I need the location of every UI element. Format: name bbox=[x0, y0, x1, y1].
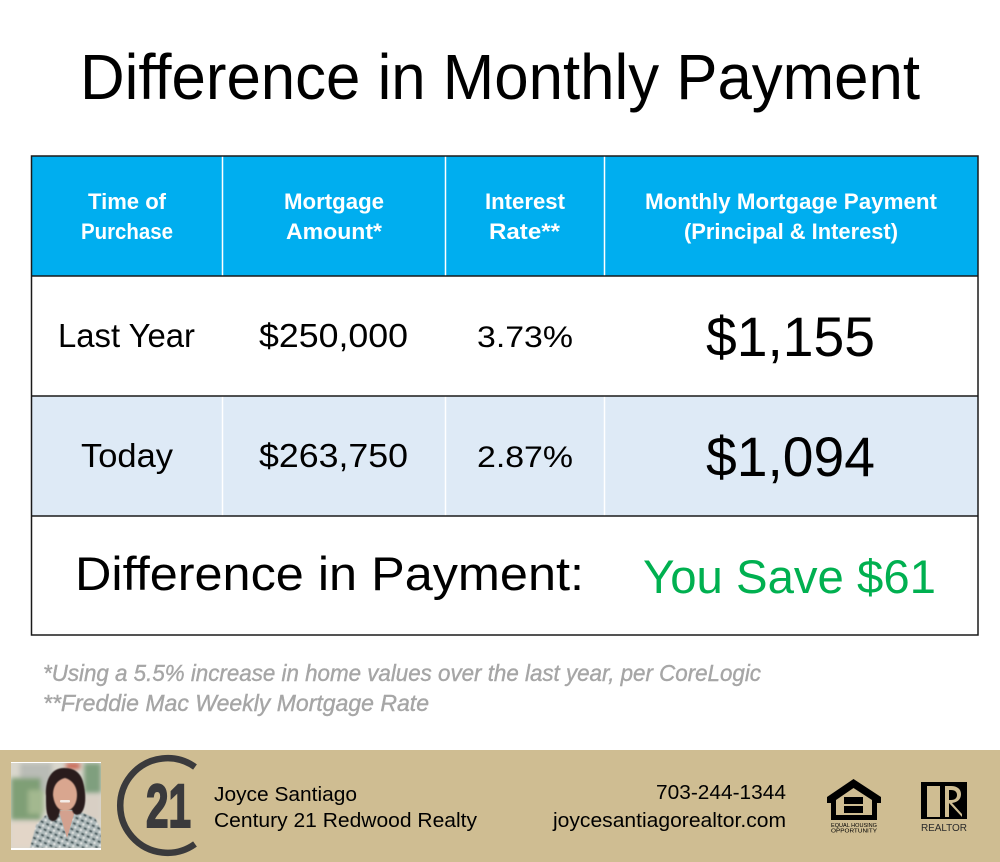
footnotes: **Freddie Mac Weekly Mortgage Rate bbox=[43, 690, 429, 716]
header: interest rate: Interest bbox=[485, 189, 566, 214]
header: time of purchase: Purchase bbox=[81, 219, 173, 244]
contact details: joycesantiagorealtor.com bbox=[552, 810, 786, 832]
icon: realtor bbox=[921, 782, 967, 834]
comparison table bbox=[31, 156, 978, 635]
agent photo bbox=[11, 762, 101, 850]
icon: realtor: REALTOR bbox=[921, 823, 967, 834]
agent name and company bbox=[214, 784, 477, 832]
row: last year: $250,000 bbox=[259, 317, 408, 354]
icon: equal housing opportunity bbox=[827, 779, 881, 834]
row: today bbox=[31, 396, 978, 516]
row: today: $263,750 bbox=[259, 437, 408, 474]
header: time of purchase bbox=[81, 189, 173, 244]
header: monthly mortgage payment: (Principal & Interest) bbox=[684, 219, 898, 244]
row: difference in payment bbox=[31, 516, 978, 635]
header: time of purchase: Time of bbox=[88, 189, 167, 214]
footer band bbox=[0, 750, 1000, 862]
row: last year: Last Year bbox=[58, 317, 195, 354]
header: mortgage amount bbox=[284, 189, 384, 244]
row: today: Today bbox=[81, 437, 174, 474]
row: difference in payment: Difference in Payment: bbox=[75, 547, 584, 600]
footnotes: *Using a 5.5% increase in home values over the last year, per CoreLogic bbox=[43, 660, 761, 686]
title: Difference in Monthly Payment bbox=[80, 41, 920, 113]
row: difference in payment: You Save $61 bbox=[643, 550, 936, 603]
contact details bbox=[552, 782, 786, 832]
century 21 logo bbox=[120, 758, 195, 853]
row: today: 2.87% bbox=[477, 441, 573, 474]
row: last year: 3.73% bbox=[477, 321, 573, 354]
row: today: $1,094 bbox=[706, 425, 875, 488]
header: interest rate bbox=[485, 189, 566, 244]
table header row bbox=[31, 156, 978, 276]
header: monthly mortgage payment bbox=[645, 189, 938, 244]
header: mortgage amount: Mortgage bbox=[284, 189, 384, 214]
header: mortgage amount: Amount* bbox=[286, 219, 382, 244]
agent name and company: Joyce Santiago bbox=[214, 784, 357, 806]
header: monthly mortgage payment: Monthly Mortgage Payment bbox=[645, 189, 938, 214]
row: last year bbox=[31, 276, 978, 396]
footnotes bbox=[43, 660, 761, 716]
icon: equal housing opportunity: EQUAL HOUSING bbox=[831, 823, 877, 829]
header: interest rate: Rate** bbox=[489, 219, 560, 244]
row: last year: $1,155 bbox=[706, 305, 875, 368]
century 21 logo: 21 bbox=[146, 772, 191, 840]
icon: equal housing opportunity: OPPORTUNITY bbox=[831, 828, 877, 834]
agent name and company: Century 21 Redwood Realty bbox=[214, 810, 477, 832]
contact details: 703-244-1344 bbox=[656, 782, 786, 804]
